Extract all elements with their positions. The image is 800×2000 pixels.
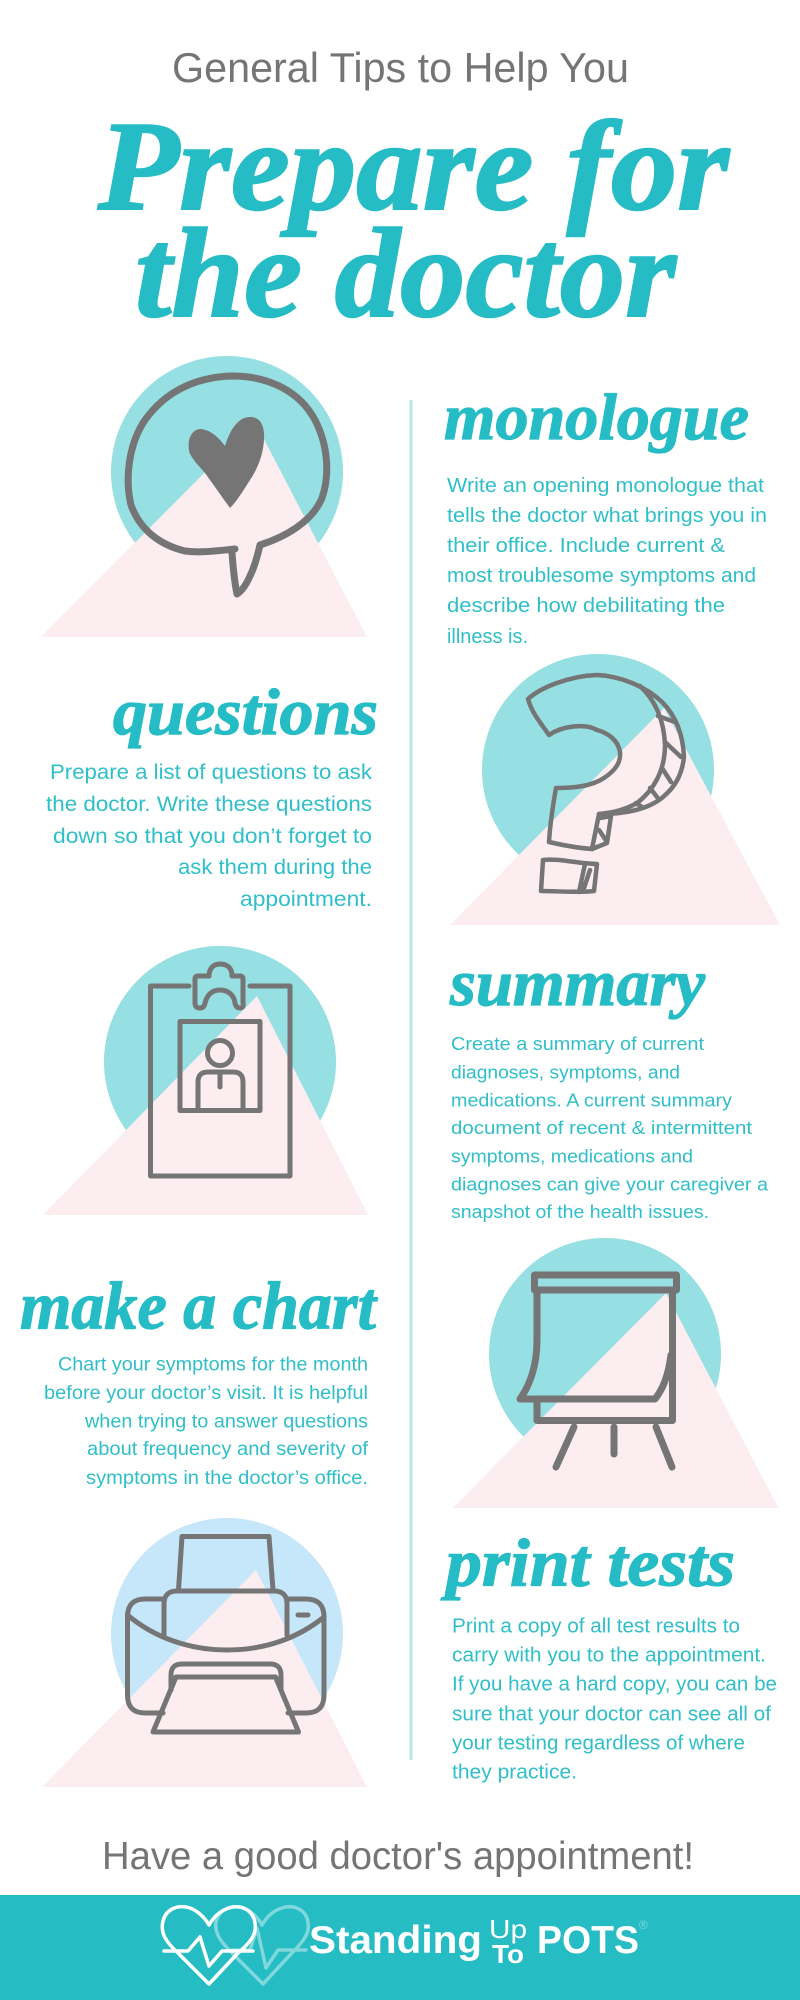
text block: monologue: their office. Include current & <box>447 535 726 557</box>
icon: clipboard with ID <box>150 964 290 1176</box>
text block: print tests: sure that your doctor can see all of <box>452 1704 771 1726</box>
heading: summary: summary <box>449 947 706 1020</box>
text block: print tests <box>452 1616 777 1784</box>
closing message: Have a good doctor's appointment! <box>102 1835 694 1878</box>
title: the doctor <box>135 202 677 344</box>
heading: monologue: monologue <box>444 381 749 454</box>
text block: print tests: they practice. <box>452 1762 577 1784</box>
logo wordmark: To <box>492 1939 524 1969</box>
panel: make a chart text <box>20 1268 378 1489</box>
text block: summary: Create a summary of current <box>451 1033 704 1054</box>
panel: monologue text <box>444 381 767 648</box>
icon: logo hearts <box>162 1907 308 1984</box>
title: Prepare for <box>97 95 730 237</box>
text block: summary: snapshot of the health issues. <box>451 1201 709 1222</box>
icon: printer <box>128 1536 324 1732</box>
panel: summary text <box>449 947 769 1222</box>
panel: monologue illustration <box>41 356 367 637</box>
text block: print tests: If you have a hard copy, you can be <box>452 1674 777 1696</box>
text block: make a chart: about frequency and severity of <box>87 1438 369 1460</box>
text block: questions: ask them during the <box>178 856 372 879</box>
text block: monologue: Write an opening monologue that <box>447 475 764 497</box>
heading: questions: questions <box>113 676 378 749</box>
title <box>97 95 730 344</box>
logo wordmark: Standing <box>309 1919 482 1962</box>
text block: questions <box>46 761 373 911</box>
panel: flip chart illustration <box>452 1238 778 1508</box>
text block: summary: symptoms, medications and <box>451 1146 693 1166</box>
panel: printer illustration <box>42 1518 367 1787</box>
text block: print tests: your testing regardless of where <box>452 1732 745 1754</box>
text block: make a chart: when trying to answer questions <box>84 1410 368 1432</box>
text block: questions: the doctor. Write these questions <box>46 793 372 816</box>
text block: summary: diagnoses can give your caregiver a <box>451 1174 769 1194</box>
icon: question mark <box>528 675 684 892</box>
text block: questions: down so that you don’t forget to <box>53 825 372 848</box>
panel: clipboard illustration <box>43 946 368 1215</box>
heading: print tests: print tests <box>441 1524 735 1600</box>
text block: make a chart: Chart your symptoms for the month <box>58 1354 368 1376</box>
text block: make a chart <box>44 1354 369 1489</box>
text block: monologue: tells the doctor what brings you in <box>447 505 767 527</box>
text block: questions: appointment. <box>240 888 372 911</box>
text block: summary: document of recent & intermittent <box>451 1117 752 1138</box>
panel: print tests text <box>441 1524 777 1784</box>
footer banner <box>0 1895 800 2000</box>
text block: monologue: illness is. <box>447 626 528 648</box>
panel: questions text <box>46 676 378 911</box>
text block: print tests: Print a copy of all test results to <box>452 1616 740 1638</box>
icon: speech bubble with heart <box>128 376 327 594</box>
logo wordmark: ® <box>639 1918 648 1932</box>
heading: make a chart: make a chart <box>20 1268 378 1344</box>
center divider line <box>410 400 412 1760</box>
text block: monologue: describe how debilitating the <box>447 595 725 617</box>
text block: summary <box>451 1033 769 1222</box>
text block: monologue <box>447 475 767 648</box>
text block: summary: diagnoses, symptoms, and <box>451 1062 680 1082</box>
text block: summary: medications. A current summary <box>451 1090 733 1110</box>
text block: questions: Prepare a list of questions to ask <box>50 761 373 784</box>
text block: print tests: carry with you to the appointment. <box>452 1644 766 1666</box>
text block: monologue: most troublesome symptoms and <box>447 565 756 587</box>
panel: question mark illustration <box>450 654 780 925</box>
logo wordmark: POTS <box>537 1919 639 1962</box>
text block: make a chart: before your doctor’s visit. It is helpful <box>44 1382 368 1404</box>
logo wordmark: Up <box>489 1914 527 1944</box>
header subtitle: General Tips to Help You <box>172 44 629 91</box>
text block: make a chart: symptoms in the doctor’s office. <box>86 1467 368 1489</box>
logo wordmark <box>309 1914 648 1969</box>
icon: flip chart <box>520 1275 676 1467</box>
